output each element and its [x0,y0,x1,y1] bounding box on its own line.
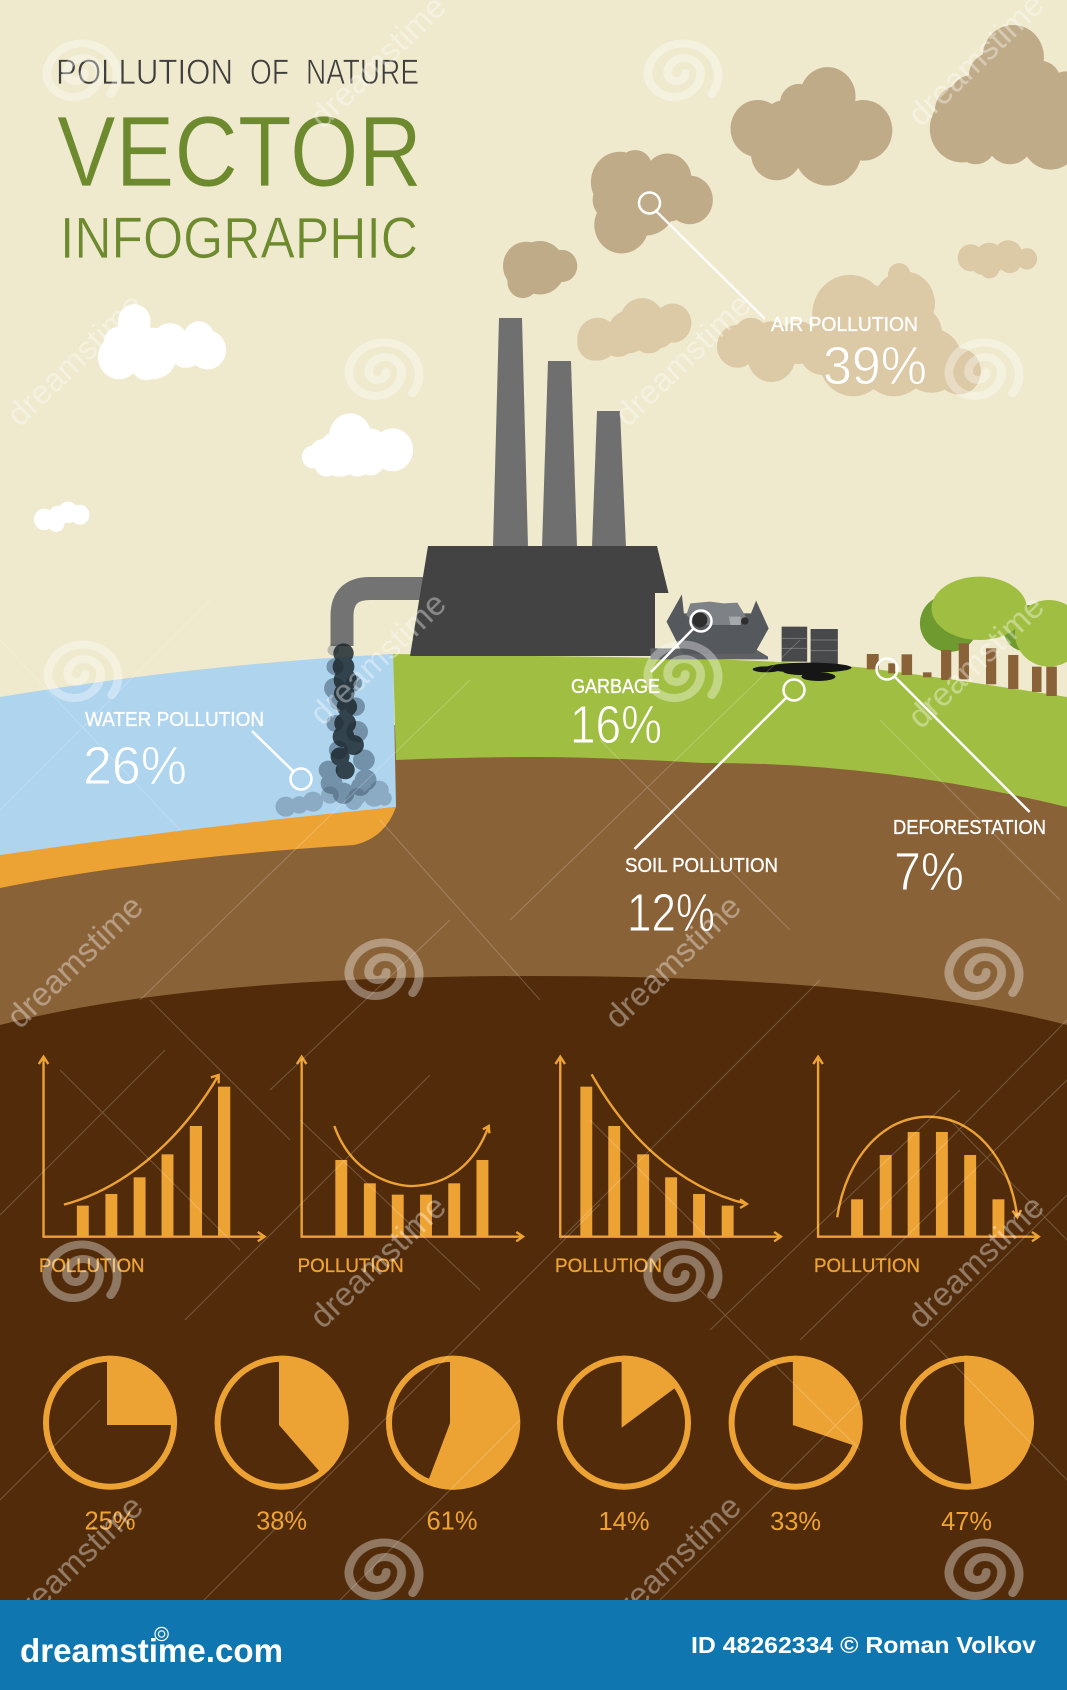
callout: air pollution [639,192,927,396]
watermark text: dreamstime [900,588,1051,735]
watermark text: dreamstime [302,1188,453,1335]
bar chart 1: rising [39,1057,265,1277]
title: pollution of nature: OF [250,53,289,92]
polluted sludge stream [275,643,392,817]
title: vector: VECTOR [57,96,422,208]
watermark text: dreamstime [597,1488,748,1635]
callout: soil pollution: 12% [627,883,715,943]
sand bank [0,807,396,888]
callout: air pollution: AIR POLLUTION [771,314,918,336]
green grass field [393,654,1067,807]
watermark text: dreamstime [0,286,150,433]
watermark text: dreamstime [900,1188,1051,1335]
watermark crossing lines [0,600,1067,1600]
pie chart 61% [389,1356,520,1536]
bar chart 4: arch [813,1057,1039,1277]
callout: deforestation: 7% [894,842,964,902]
pie chart 38%: 38% [256,1508,307,1536]
title: pollution of nature: NATURE [306,53,419,92]
pie chart 61%: 61% [426,1508,478,1536]
watermark text: dreamstime [597,888,748,1035]
callout: soil pollution: SOIL POLLUTION [625,855,778,877]
title: pollution of nature: POLLUTION [56,53,233,92]
callout: water pollution [83,709,312,796]
pie chart 33%: 33% [770,1508,821,1536]
callout: air pollution: 39% [823,336,927,396]
watermark text: dreamstime [302,585,453,732]
callout: water pollution: WATER POLLUTION [85,709,264,731]
pie chart 25%: 25% [84,1508,136,1536]
chimney 2 [542,361,577,547]
chimney 3 [592,411,626,547]
watermark text: dreamstime [0,888,150,1035]
oil barrels and spill [753,627,851,681]
pie chart 47% [903,1356,1033,1536]
chimney 1 [493,318,528,547]
light smoke clouds [577,240,1037,396]
bar chart 3: falling [555,1057,781,1277]
bar chart 2: dip: POLLUTION [298,1255,404,1277]
garbage container [651,594,769,659]
callout: garbage [570,610,712,755]
mid soil layer [0,725,1067,1025]
watermark text: dreamstime [607,286,758,433]
pie chart 47%: 47% [941,1508,992,1536]
footer credit: ID 48262334 © Roman Volkov [691,1632,1036,1658]
factory building [410,546,668,656]
callout: garbage: GARBAGE [571,676,660,698]
footer logo swirl [155,1627,168,1641]
white clouds [34,304,413,532]
callout: soil pollution [625,680,804,943]
title: infographic: INFOGRAPHIC [60,206,418,271]
bar chart 1: rising: POLLUTION [39,1255,144,1277]
pie chart 14%: 14% [598,1508,650,1536]
watermark text: dreamstime [0,1488,150,1635]
bar chart 4: arch: POLLUTION [814,1255,920,1277]
footer band [0,1600,1067,1690]
title block [56,53,422,271]
water [0,654,396,855]
pie chart 25% [46,1356,177,1536]
callout: water pollution: 26% [83,736,187,796]
bar chart 2: dip [297,1057,523,1277]
callout: garbage: 16% [570,695,662,755]
factory [342,318,668,656]
callout: deforestation: DEFORESTATION [893,817,1046,839]
pie chart 14% [560,1356,688,1536]
footer logo text: dreamstime.com [20,1632,283,1669]
dark smoke clouds [503,25,1067,298]
waste pipe [342,588,425,646]
pie chart 33% [732,1356,863,1536]
deep soil layer [0,960,1067,1600]
trees and stumps [867,577,1067,696]
pie chart 38% [218,1356,349,1536]
bar chart 3: falling: POLLUTION [555,1255,662,1277]
callout: deforestation [876,658,1046,902]
